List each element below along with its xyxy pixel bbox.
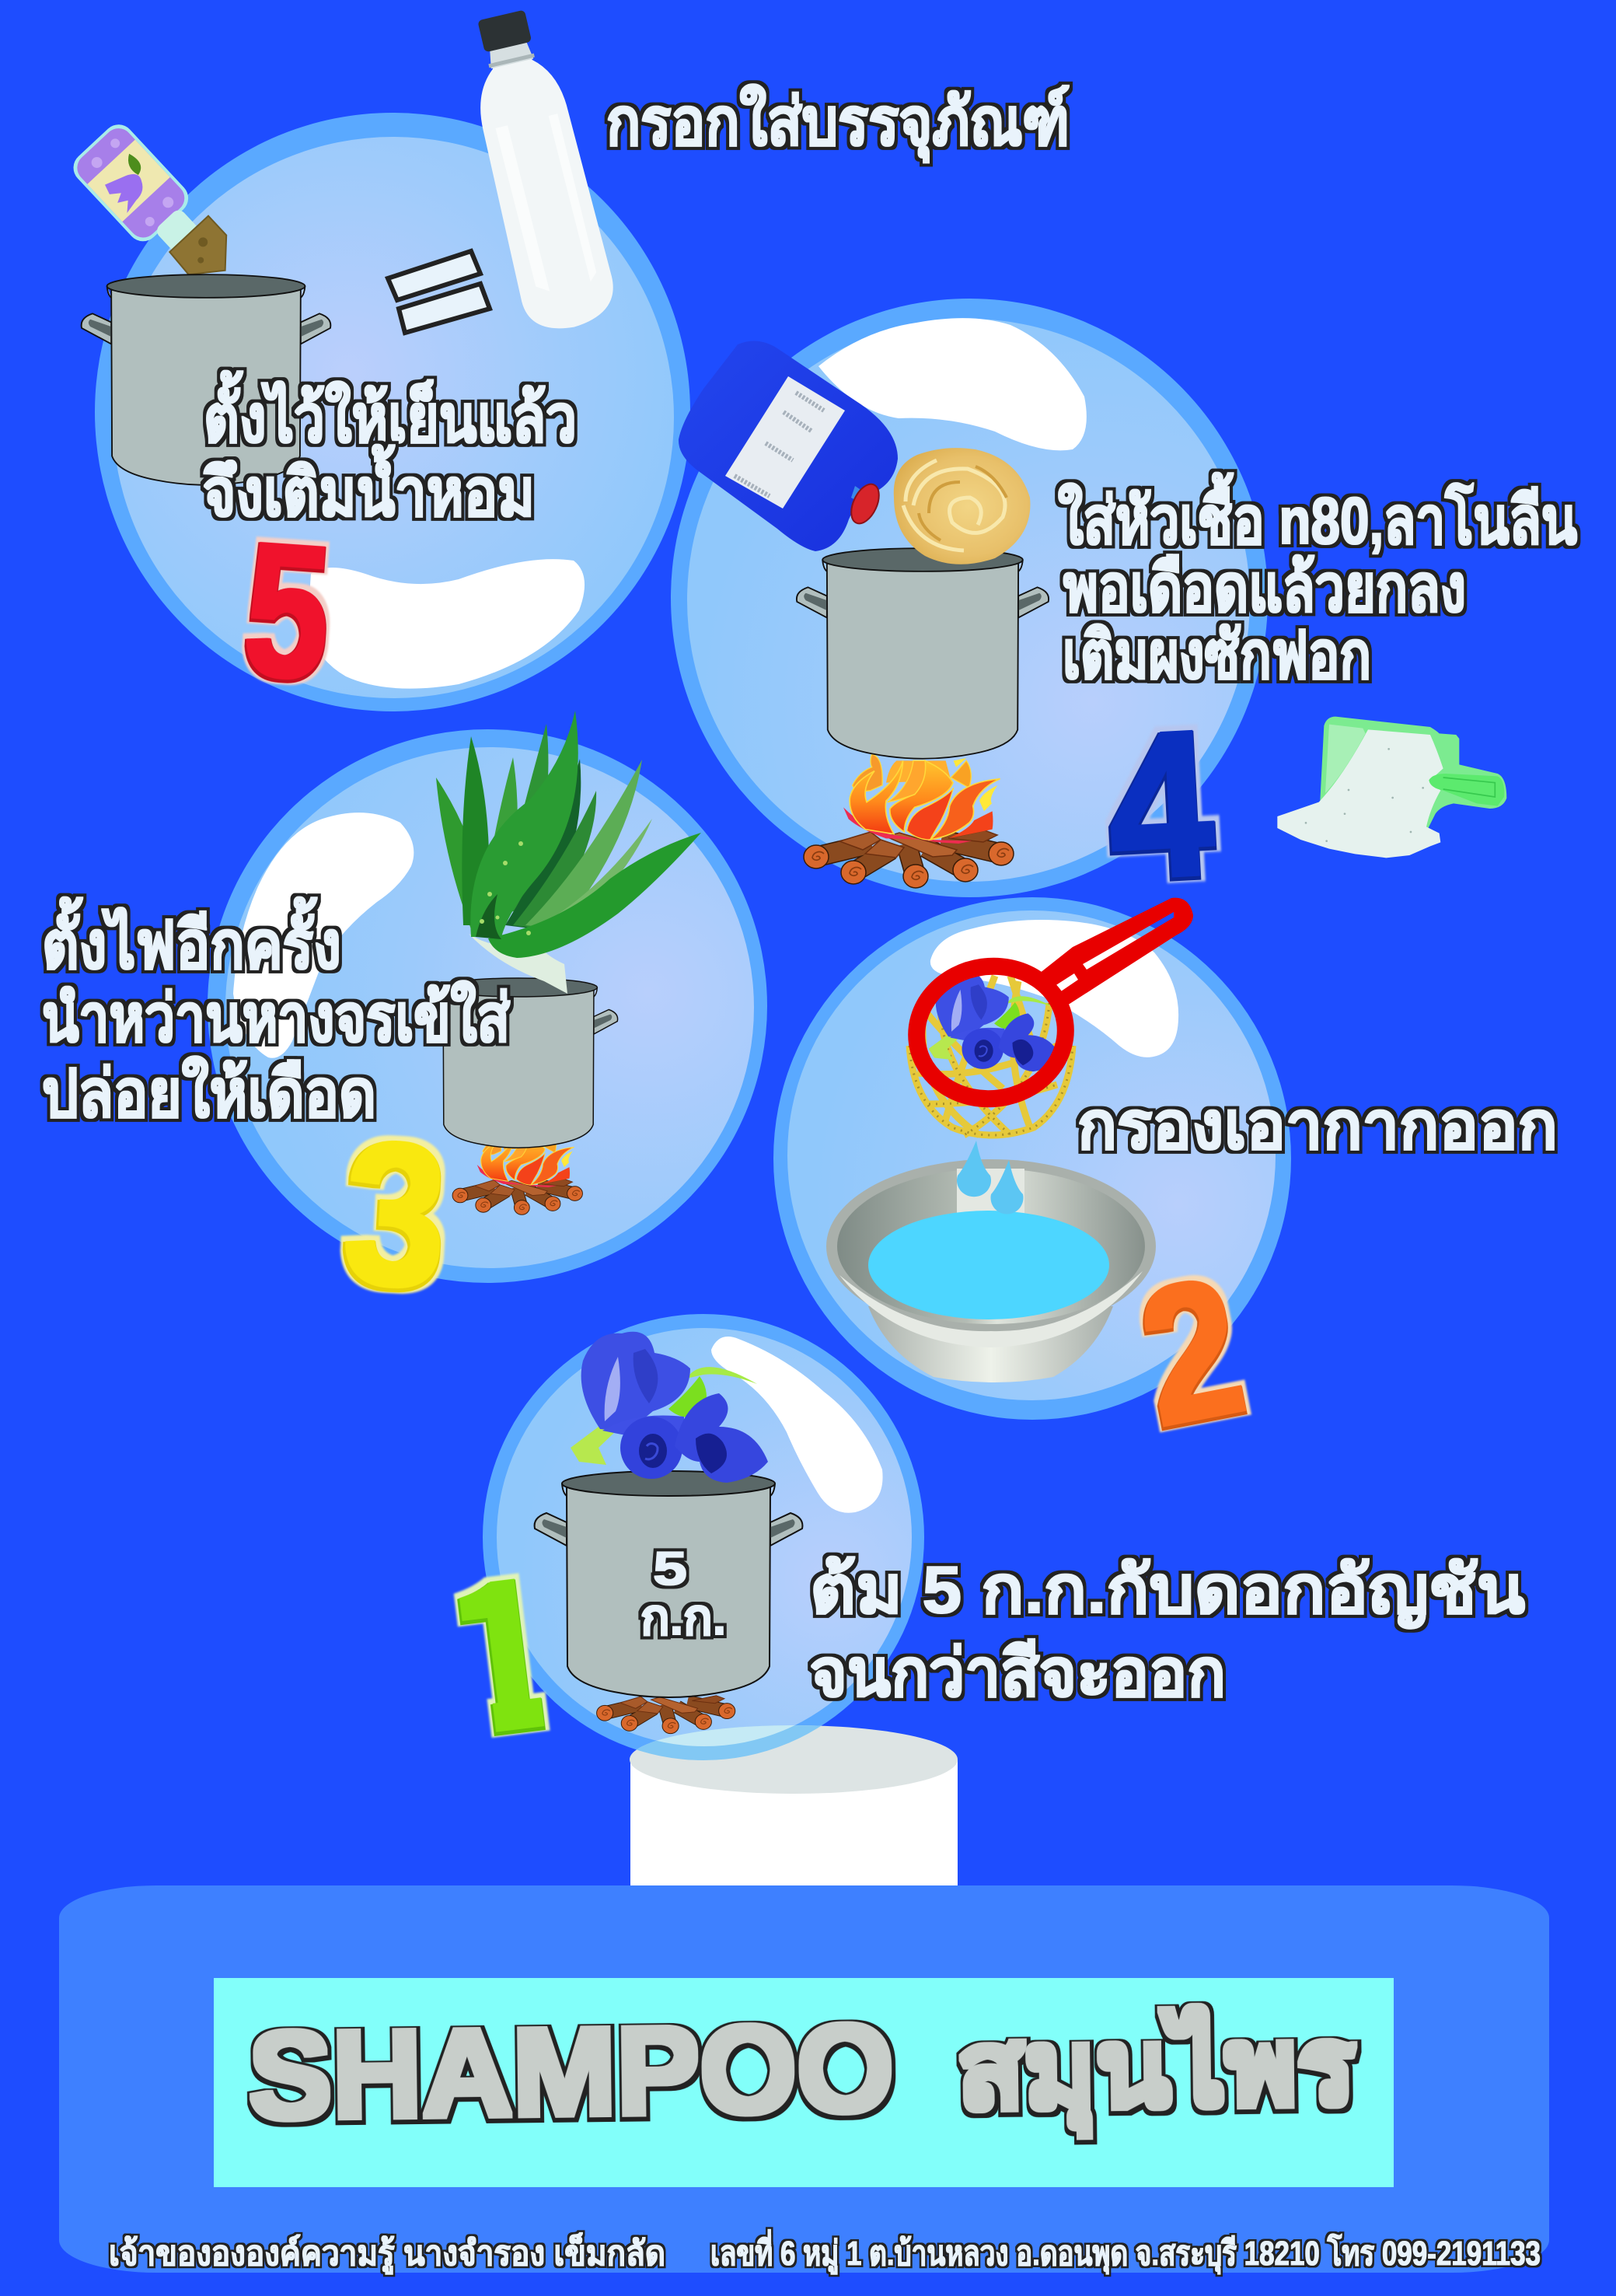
text: step 5: ตั้งไว้ให้เย็นแล้ว <box>204 370 577 456</box>
pot: step 5 <box>82 274 330 485</box>
text: step 6: กรอกใส่บรรจุภัณฑ์ <box>606 84 1070 163</box>
text: step 3: นำหว่านหางจรเข้ใส่ <box>42 980 510 1056</box>
pedestal <box>630 1725 958 1887</box>
number 4: 4 <box>1103 687 1219 922</box>
text: step 4 <box>1058 472 1577 693</box>
panel: bubble step 1 <box>483 1314 924 1760</box>
logs and pot: step 1 <box>535 1471 802 1734</box>
text: step 1: ต้ม 5 ก.ก.กับดอกอัญชัน <box>810 1553 1525 1630</box>
text: step 2: กรองเอากากออก <box>1077 1089 1558 1163</box>
number 5: 5 <box>238 502 337 719</box>
icon: metal bowl with water <box>826 1159 1156 1382</box>
text: step 4: เติมผงซักฟอก <box>1063 619 1371 693</box>
panel: title box <box>214 1978 1394 2187</box>
label: pot weight <box>640 1543 726 1645</box>
icon: strainer with flowers <box>908 898 1193 1135</box>
title: SHAMPOO <box>248 1998 895 2145</box>
text: step 3: ปล่อยให้เดือด <box>42 1056 376 1131</box>
icon: butterfly pea flowers <box>571 1332 768 1483</box>
text: step 1 <box>810 1553 1525 1711</box>
panel: bubble step 4 <box>671 299 1268 897</box>
text: step 3 <box>42 896 510 1131</box>
text: step 1: จนกว่าสีจะออก <box>810 1637 1226 1711</box>
icon: water drops <box>957 1141 1023 1214</box>
panel: bubble step 2 <box>773 897 1291 1420</box>
number 3: 3 <box>339 1099 452 1330</box>
title <box>248 1992 1356 2147</box>
icon: lanolin blob <box>894 448 1030 564</box>
fire and pot: step 3 <box>440 978 618 1214</box>
number 1: 1 <box>429 1490 575 1792</box>
icon: blue chemical canister <box>679 341 898 551</box>
text: step 4: พอเดือดแล้วยกลง <box>1063 552 1466 626</box>
icon: aloe vera <box>436 711 701 994</box>
panel: base <box>59 1885 1549 2273</box>
number 2: 2 <box>1126 1237 1258 1466</box>
text: step 5: จึงเติมน้ำหอม <box>203 444 535 530</box>
panel: bubble step 5 <box>95 113 690 711</box>
icon: plastic bottle filled with shampoo <box>457 4 621 337</box>
label: pot weight: 5 <box>653 1543 687 1595</box>
title: สมุนไพร <box>957 2003 1356 2139</box>
fire and pot: step 4 <box>797 548 1049 888</box>
text: step 5 <box>203 370 577 530</box>
text: footer owner: เจ้าของององค์ความรู้ นางจำรอง เข็มกลัด <box>109 2232 665 2274</box>
text: step 3: ตั้งไฟอีกครั้ง <box>42 896 341 983</box>
icon: equals sign <box>388 251 490 333</box>
panel: bubble step 3 <box>208 729 767 1283</box>
icon: perfume bottle <box>67 118 244 301</box>
label: pot weight: ก.ก. <box>640 1589 726 1645</box>
icon: detergent powder scoop <box>1277 717 1506 858</box>
